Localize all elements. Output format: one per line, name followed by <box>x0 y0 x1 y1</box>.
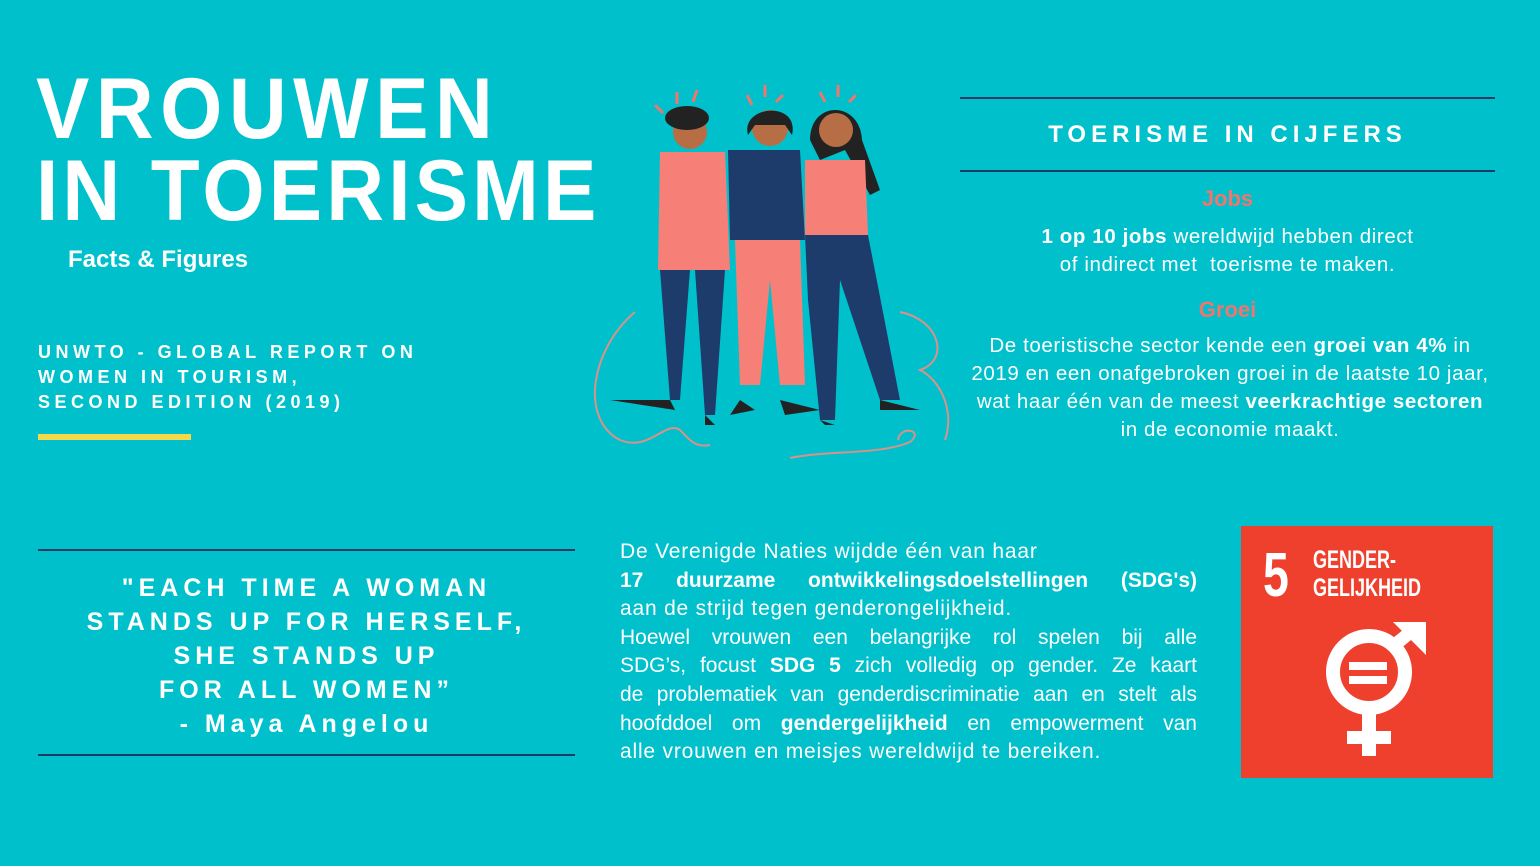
title: IN TOERISME <box>36 143 601 239</box>
figure 3 <box>805 110 920 425</box>
figure 2 <box>728 110 820 415</box>
quote block <box>38 549 575 756</box>
source: WOMEN IN TOURISM, <box>38 367 301 387</box>
icon: SDG 5: 5 <box>1263 541 1289 610</box>
source <box>38 342 417 412</box>
SDG paragraph: aan de strijd tegen genderongelijkheid. <box>620 597 1012 620</box>
quote block: "EACH TIME A WOMAN <box>122 574 491 602</box>
SDG paragraph: de problematiek van genderdiscriminatie aan en stelt als <box>620 683 1197 706</box>
groei text: 2019 en een onafgebroken groei in de laatste 10 jaar, <box>971 362 1489 385</box>
jobs text: 1 op 10 jobs wereldwijd hebben direct <box>1041 225 1414 248</box>
SDG paragraph: 17 duurzame ontwikkelingsdoelstellingen (SDG's) <box>620 569 1197 592</box>
jobs text <box>1041 225 1414 276</box>
source: SECOND EDITION (2019) <box>38 392 345 412</box>
groei text: De toeristische sector kende een groei van 4% in <box>989 334 1471 357</box>
subtitle: Facts & Figures <box>68 246 248 273</box>
icon: SDG 5 <box>1241 526 1493 778</box>
yellow bar <box>38 434 191 440</box>
panel heading: TOERISME IN CIJFERS <box>1048 121 1407 148</box>
SDG paragraph: SDG’s, focust SDG 5 zich volledig op gender. Ze kaart <box>620 654 1197 677</box>
quote block: SHE STANDS UP <box>174 642 439 670</box>
panel: toerisme in cijfers <box>960 97 1495 441</box>
jobs heading: Jobs <box>1202 186 1253 211</box>
quote block: FOR ALL WOMEN” <box>159 676 454 704</box>
icon: SDG 5: GENDER- <box>1313 546 1396 574</box>
title: VROUWEN <box>36 61 499 157</box>
SDG paragraph: Hoewel vrouwen een belangrijke rol spelen bij alle <box>620 626 1197 649</box>
title <box>36 61 601 239</box>
quote block: - Maya Angelou <box>180 710 433 738</box>
illustration: three women <box>594 85 950 459</box>
groei heading: Groei <box>1199 297 1256 322</box>
SDG paragraph: De Verenigde Naties wijdde één van haar <box>620 540 1038 563</box>
groei text: wat haar één van de meest veerkrachtige sectoren <box>977 390 1483 413</box>
groei text: in de economie maakt. <box>1121 418 1339 441</box>
SDG paragraph <box>620 540 1197 763</box>
figure 1 <box>610 106 730 425</box>
icon: SDG 5: GELIJKHEID <box>1313 574 1421 602</box>
groei text <box>971 334 1489 441</box>
jobs text: of indirect met toerisme te maken. <box>1060 253 1395 276</box>
quote block: STANDS UP FOR HERSELF, <box>87 608 526 636</box>
SDG paragraph: hoofddoel om gendergelijkheid en empowerment van <box>620 712 1197 735</box>
source: UNWTO - GLOBAL REPORT ON <box>38 342 417 362</box>
SDG paragraph: alle vrouwen en meisjes wereldwijd te bereiken. <box>620 740 1101 763</box>
